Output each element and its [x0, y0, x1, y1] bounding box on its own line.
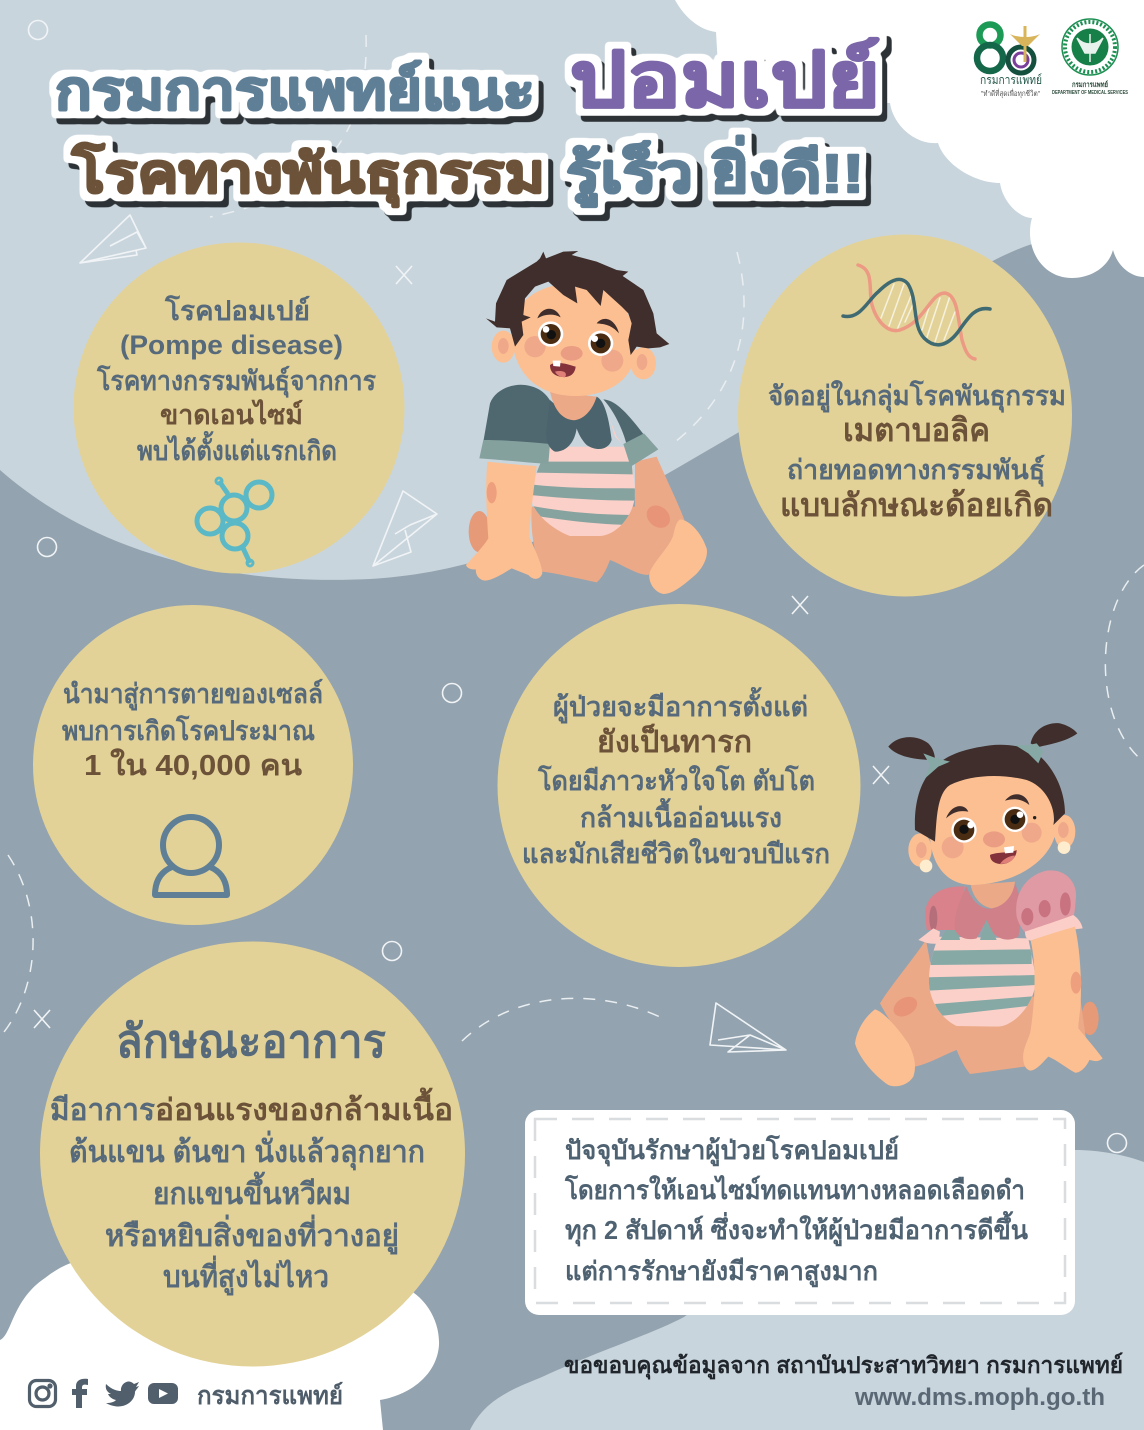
- logo: 80 years department: "ทำดีที่สุดเพื่อทุกชีวิต": [981, 88, 1040, 98]
- text: circle 2 lines: เมตาบอลิค: [843, 412, 990, 448]
- icon: paper plane bottom: [710, 1003, 786, 1052]
- text: symptoms lines: ต้นแขน ต้นขา นั่งแล้วลุกยาก: [69, 1130, 425, 1171]
- text: circle 2 lines: แบบลักษณะด้อยเกิด: [780, 487, 1053, 523]
- text: circle 1 lines: พบได้ตั้งแต่แรกเกิด: [137, 430, 337, 466]
- text: circle 4 lines: โดยมีภาวะหัวใจโต ตับโต: [537, 764, 815, 796]
- logo: 80 years department: กรมการแพทย์: [980, 73, 1042, 87]
- text: circle 2 lines: ถ่ายทอดทางกรรมพันธุ์: [787, 454, 1045, 487]
- background: white cloud bottom-left: [0, 1257, 439, 1430]
- text: treatment lines: โดยการให้เอนไซม์ทดแทนทางหลอดเลือดดำ: [564, 1174, 1025, 1205]
- text: circle 4 lines: และมักเสียชีวิตในขวบปีแรก: [522, 838, 830, 869]
- decorative cross markers: [34, 266, 889, 1028]
- heading: symptoms: ลักษณะอาการ: [116, 1015, 386, 1067]
- panel: circle Pompe disease: [74, 242, 404, 574]
- icon: paper plane middle: [373, 491, 437, 566]
- text: circle 4 lines: กล้ามเนื้ออ่อนแรง: [580, 797, 782, 833]
- panel: circle symptoms: [40, 942, 465, 1366]
- title accent: the better: ยิ่งดี!!: [711, 135, 864, 204]
- panel: treatment note box: [525, 1110, 1075, 1315]
- logo: Department of Medical Services seal: DEPARTMENT OF MEDICAL SERVICES: [1052, 90, 1129, 96]
- text: circle 1 lines: (Pompe disease): [120, 330, 343, 360]
- panel: circle metabolic: [738, 234, 1072, 596]
- background: slate wedge under cloud: [1000, 242, 1144, 300]
- text: circle 2 lines: [768, 379, 1066, 523]
- text: circle 1 lines: โรคทางกรรมพันธุ์จากการ: [96, 364, 376, 398]
- decorative ring markers: [28, 20, 1126, 1152]
- text: circle 3 lines: นำมาสู่การตายของเซลล์: [63, 678, 323, 711]
- text: symptoms lines: หรือหยิบสิ่งของที่วางอยู่: [105, 1214, 399, 1255]
- title: [55, 38, 880, 208]
- panel: circle cell death prevalence: [33, 605, 353, 925]
- text: circle 3 lines: [62, 678, 323, 782]
- logo: Department of Medical Services seal: กรมการแพทย์: [1072, 80, 1108, 89]
- icon: facebook: [72, 1379, 88, 1408]
- background: light top region: [0, 0, 1144, 580]
- text: department handle: กรมการแพทย์: [197, 1381, 343, 1410]
- text: symptoms lines: บนที่สูงไม่ไหว: [163, 1255, 329, 1296]
- text: symptoms lines: มีอาการ: [50, 1094, 155, 1127]
- text: circle 1 lines: ขาดเอนไซม์: [160, 399, 303, 430]
- text: circle 1 lines: โรคปอมเปย์: [164, 294, 310, 326]
- text: symptoms lines: อ่อนแรงของกล้ามเนื้อ: [155, 1087, 453, 1127]
- text: treatment lines: [564, 1134, 1028, 1288]
- illustration: baby girl: [855, 723, 1103, 1086]
- text: credit: ขอขอบคุณข้อมูลจาก สถาบันประสาทวิทยา กรมการแพทย์: [564, 1352, 1123, 1380]
- logo: Department of Medical Services seal: [1052, 19, 1129, 96]
- social icons: [30, 1379, 178, 1408]
- panel: circle infant onset: [498, 604, 860, 967]
- text: circle 4 lines: ผู้ป่วยจะมีอาการตั้งแต่: [553, 686, 808, 724]
- text: treatment lines: ปัจจุบันรักษาผู้ป่วยโรคปอมเปย์: [565, 1134, 899, 1167]
- text: circle 4 lines: [522, 686, 830, 869]
- title highlight: Pompe: ปอมเปย์: [570, 38, 880, 123]
- icon: youtube: [148, 1383, 178, 1404]
- text: treatment lines: ทุก 2 สัปดาห์ ซึ่งจะทำให้ผู้ป่วยมีอาการดีขึ้น: [565, 1210, 1028, 1247]
- title line 1: กรมการแพทย์แนะ: [55, 60, 535, 121]
- text: circle 3 lines: พบการเกิดโรคประมาณ: [62, 714, 315, 746]
- text: circle 4 lines: ยังเป็นทารก: [597, 723, 752, 759]
- background: light bottom-right region: [470, 1150, 1144, 1430]
- title accent: know early: รู้เร็ว: [566, 142, 693, 207]
- icon: instagram: [30, 1380, 56, 1406]
- text: circle 2 lines: จัดอยู่ในกลุ่มโรคพันธุกรรม: [768, 379, 1066, 413]
- text: circle 3 lines: 1 ใน 40,000 คน: [84, 748, 302, 782]
- illustration: baby boy: [466, 251, 707, 594]
- icon: twitter: [106, 1382, 139, 1407]
- title line 2: โรคทางพันธุกรรม: [71, 142, 545, 208]
- icon: paper plane top-left: [80, 215, 146, 263]
- icon: molecule: [197, 478, 272, 566]
- icon: DNA helix: [843, 265, 990, 359]
- logo: 80 years department: [977, 24, 1042, 98]
- text: website: www.dms.moph.go.th: [854, 1384, 1105, 1411]
- icon: person: [155, 817, 227, 895]
- text: symptoms lines: [50, 1087, 453, 1296]
- text: symptoms lines: ยกแขนขึ้นหวีผม: [153, 1171, 351, 1211]
- background: white cloud top-right: [675, 0, 1144, 278]
- text: treatment lines: แต่การรักษายังมีราคาสูงมาก: [565, 1256, 878, 1288]
- text: circle 1 lines: [96, 294, 376, 466]
- decorative dashed paths: [0, 35, 1144, 1041]
